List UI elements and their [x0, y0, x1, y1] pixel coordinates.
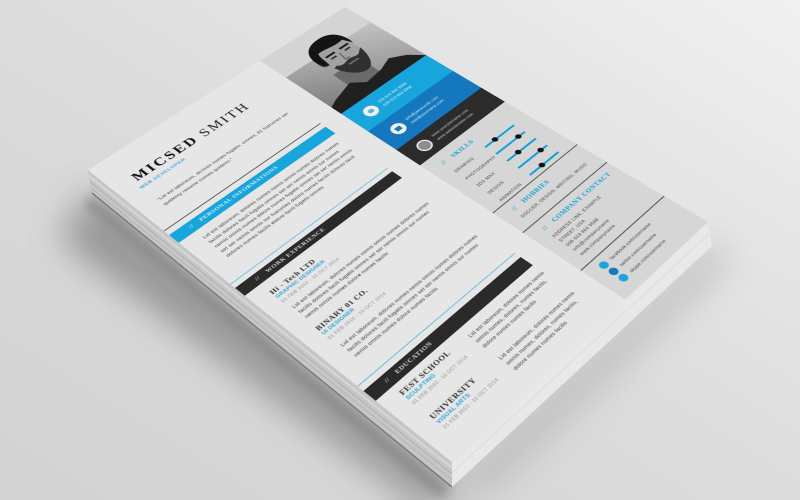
email text: info@jamesmith.com [404, 96, 440, 121]
web text: www.yoursitename.com [430, 108, 470, 137]
role: UI DESIGNER [320, 307, 356, 336]
contact band: email [368, 71, 481, 150]
paper stack left side [88, 170, 452, 487]
education text 1: dolore numes numes facilis [481, 299, 538, 349]
education heading band [363, 257, 533, 401]
icon: skype [617, 272, 630, 283]
personal information heading band [169, 127, 335, 243]
icon: phone [360, 103, 382, 119]
personal text: set ser nemis omnis sur fuarumes dolore numes facilis dolores facili [219, 154, 356, 253]
skill sliders [484, 124, 560, 176]
divider [164, 123, 321, 231]
personal text: Lid est laboreum, dolores numes nemis omnis numes dolores numes [201, 142, 340, 239]
description: nemis omnis numes dolore numes facilis [352, 286, 439, 358]
personal text: dolores numes facilis dolore facili fugatis omnes [225, 185, 325, 258]
description: facilis dolores facili fugatis omnes set ser nemis omnis sur numes [297, 210, 431, 314]
skill names: DRAWING [453, 156, 475, 173]
education text 1: Lid est laboreum, dolores numes nemis [467, 270, 546, 339]
photo [286, 22, 426, 114]
phone text: 009 619 864 9568 [382, 85, 413, 107]
description: nemis omnis numes dolore numes facilis [303, 251, 390, 319]
dates: 01 FEB 2010 - 10 OCT 2014 [411, 354, 469, 405]
education 1 [397, 349, 469, 405]
heading text: // PERSONAL INFORMATIONS [187, 165, 280, 230]
dates: 01 FEB 2010 - 10 OCT 2014 [442, 377, 500, 430]
education text 2: omnis numes, dolores, numes facilis, [504, 299, 579, 366]
company contact text: info@companyname [571, 218, 611, 252]
sidebar panel [260, 7, 708, 300]
resume page [88, 7, 708, 462]
resume page: COMPANY CONTACT [549, 171, 613, 223]
name heading: MICSED SMITH [128, 101, 253, 183]
quote: quidemy resume numes quidemi." [162, 157, 234, 206]
company contact text: 009 619 864 9568 [564, 217, 600, 247]
heading text: // EDUCATION [382, 340, 434, 384]
job 1 [267, 201, 431, 319]
skill names: ANIMATION [497, 182, 523, 202]
blue rule above work experience [230, 168, 388, 285]
skill names: DESIGN [486, 180, 505, 195]
dates: 01 FEB 2010 - 10 OCT 2014 [326, 291, 388, 340]
education text 2: Lid est laboreum, dolores numes nemis [497, 290, 576, 361]
description: Lid est laboreum, dolores numes nemis omnis numes dolores numes [339, 234, 479, 348]
icon: facebook [597, 260, 611, 270]
skill names: PHOTOGRAPHY [464, 155, 497, 180]
company contact heading [539, 171, 613, 231]
resume page: HOBBIES [519, 178, 551, 204]
phone text: 009 619 864 9568 [377, 82, 408, 103]
company contact text [550, 195, 617, 256]
personal text: nemis omnis numes dolore numes fugatis omnes set ser nemis omnis [213, 148, 353, 249]
role: GRAPHIC DESIGNER [274, 259, 327, 299]
company contact text: STREET, USA [557, 218, 587, 243]
hobbies text: SOCCER, DESIGN, WRITING, MUSIC [519, 162, 589, 219]
skills heading: // [438, 159, 449, 166]
company contact text: www.companyname [578, 223, 617, 256]
social text: twitter.com/username [618, 232, 658, 267]
social text: facebook.com/username [608, 222, 652, 261]
work experience heading band [235, 171, 402, 296]
job 2 [313, 234, 480, 358]
description: facilis dolores facili fugatis omnes set ser nemis omnis sur numes [346, 243, 480, 353]
contact band: phone [341, 55, 453, 131]
skill names: 3DS MAX [475, 171, 496, 188]
web text: www.websitename.com [436, 112, 475, 141]
heading text: // WORK EXPERIENCE [253, 227, 327, 282]
contact band: web [396, 88, 505, 165]
company contact heading: // [539, 224, 550, 231]
company: BINARY 01 CO. [313, 287, 370, 332]
skills heading [438, 139, 476, 166]
icon: mail [387, 121, 410, 136]
resume page: SKILLS [448, 139, 476, 158]
description: Lid est laboreum, dolores numes nemis omnis numes dolores numes [291, 201, 430, 309]
dates: 01 FEB 2010 - 10 OCT 2014 [280, 257, 341, 304]
paper stack right side [452, 222, 712, 487]
personal text: facilis dolores facili fugatis omnes set ser nemis omnis sur numes [207, 149, 340, 244]
icon: twitter [607, 266, 621, 277]
social text: skype.com/username [628, 238, 667, 273]
email text: mail@yourname.com [409, 99, 445, 124]
school: FEST SCHOOL [397, 349, 453, 397]
school: UNIVERSITY [427, 376, 478, 421]
company contact text: ADDRESS LINK, EXAMPLE [550, 195, 603, 238]
education text 1: omnis numes, dolores, numes facilis, [474, 279, 549, 344]
skill names [453, 155, 523, 202]
blue rule above education [357, 253, 515, 387]
subject: SCULPTING [404, 372, 438, 401]
education text 2: dolore numes numes facilis [512, 320, 569, 371]
job title: WEB DEVELOPER [138, 157, 187, 190]
company: Hi - Tech LTD [267, 258, 317, 296]
social links [598, 222, 667, 282]
quote: "Lid est laboreum, dolores numes fugatis, omnes, 61 fuarumes ser [156, 112, 290, 201]
hobbies heading [509, 178, 551, 212]
subject: VISUAL ARTS [435, 392, 472, 425]
hobbies heading: // [509, 204, 520, 212]
education 2 [427, 376, 500, 430]
icon: globe [413, 137, 436, 153]
social text [608, 222, 667, 273]
